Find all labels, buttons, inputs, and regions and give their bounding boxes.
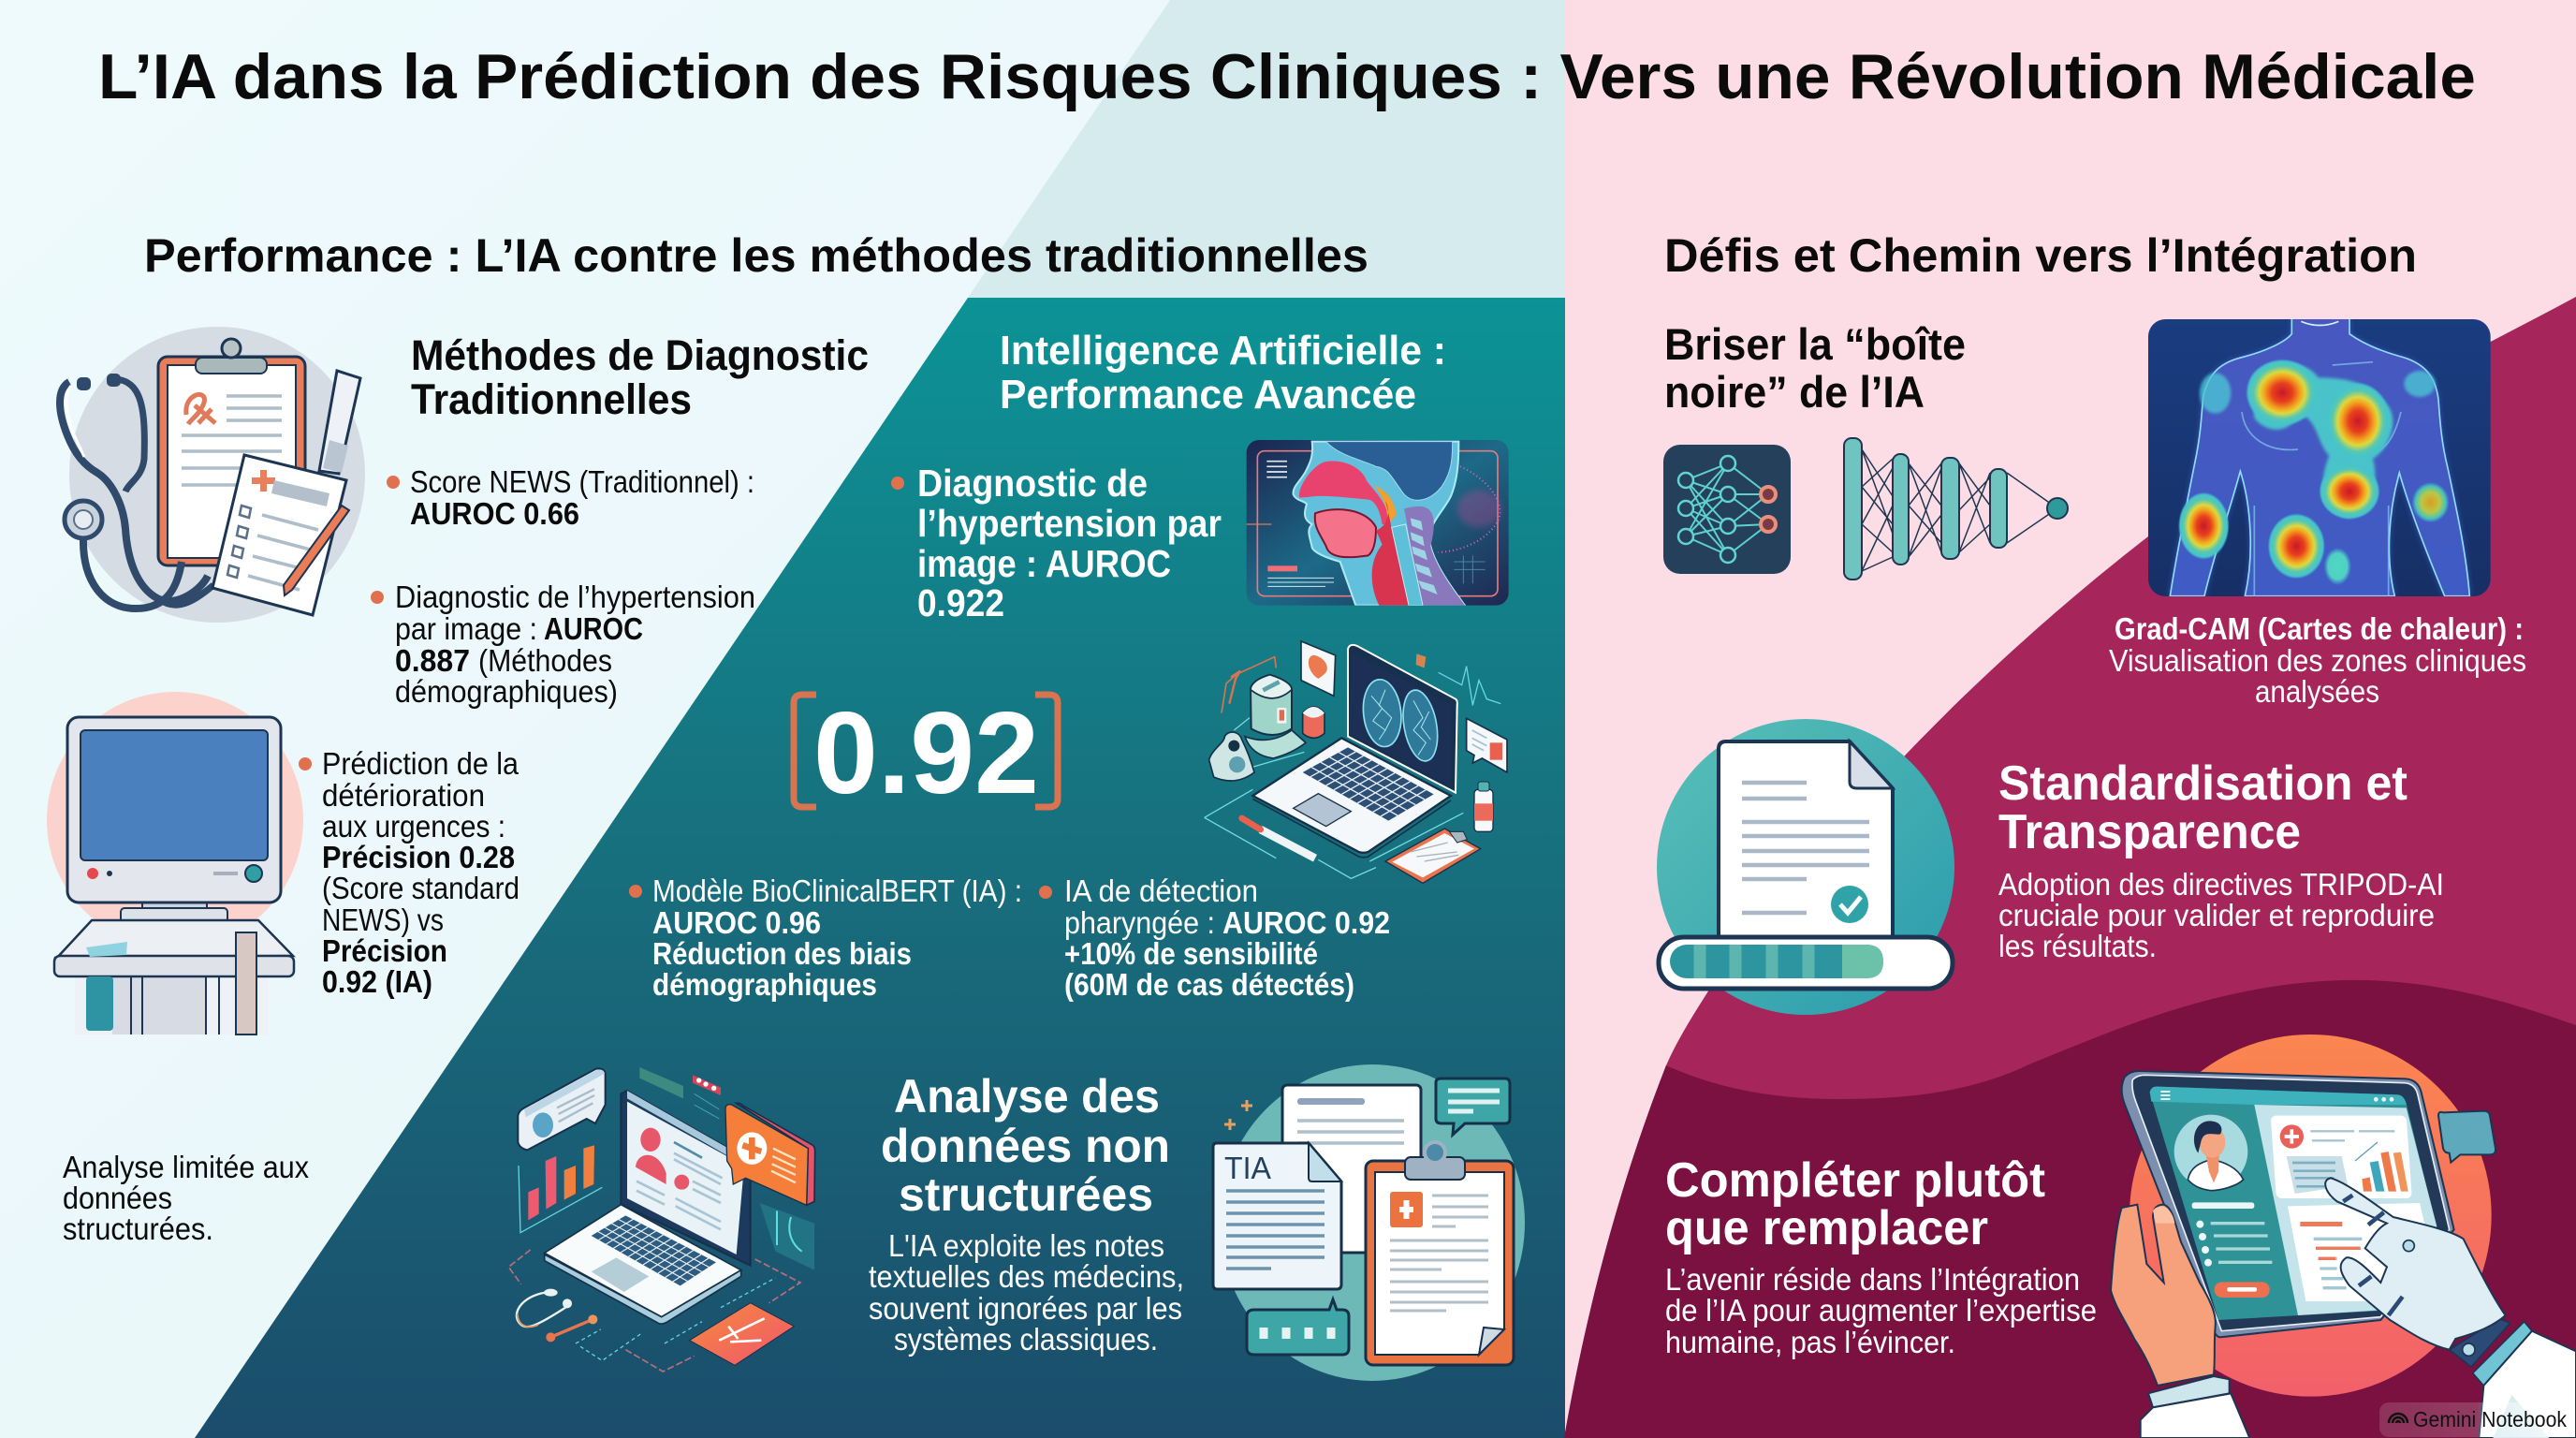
bullet: hypertension by image: 0.887 — [395, 643, 470, 678]
bullet: pharyngeal detection AI — [1039, 873, 1390, 1002]
background: light left panel — [0, 0, 1565, 1438]
icon: clinical notes and documents: TIA — [1224, 1151, 1271, 1185]
icon: tablet with human and robot hands — [2111, 1034, 2576, 1438]
bullet: NEWS score: AUROC 0.66 — [410, 496, 579, 531]
bullet: emergency deterioration: NEWS) vs — [322, 902, 444, 937]
heading: performance section: Performance : L’IA contre les méthodes traditionnelles — [144, 229, 1368, 282]
text: limitation note: structurées. — [63, 1211, 213, 1246]
heading: traditional methods: Traditionnelles — [411, 375, 692, 423]
bullet: AI hypertension diagnosis: 0.922 — [917, 581, 1004, 624]
panel: traditional methods — [47, 327, 869, 1246]
bullet: AI hypertension diagnosis: image : AUROC — [917, 542, 1171, 585]
caption: Grad-CAM: Grad-CAM (Cartes de chaleur) : — [2115, 611, 2524, 646]
bullet: hypertension by image: (Méthodes — [478, 643, 612, 678]
icon: medical monitor on cart — [47, 692, 303, 1034]
heading: standardisation: Transparence — [1998, 805, 2301, 859]
bullet: pharyngeal detection AI: (60M de cas détectés) — [1064, 967, 1354, 1002]
icon: validated document with progress bar — [1657, 719, 1954, 1015]
bullet: NEWS score — [387, 464, 754, 531]
bullet: emergency deterioration — [299, 746, 520, 999]
text: complement description: L’avenir réside dans l’Intégration — [1665, 1262, 2080, 1297]
text: unstructured data description: systèmes classiques. — [894, 1322, 1158, 1357]
heading: unstructured data: structurées — [899, 1168, 1153, 1221]
bullet: emergency deterioration: (Score standard — [322, 871, 520, 905]
text: unstructured data description — [869, 1228, 1184, 1357]
bullet: emergency deterioration: Prédiction de la — [322, 746, 520, 781]
bullet: BioClinicalBERT: AUROC 0.96 — [652, 905, 821, 940]
text: standardisation description — [1998, 867, 2444, 963]
heading: artificial intelligence: Intelligence Artificielle : — [1000, 328, 1446, 374]
heading: unstructured data: données non — [881, 1120, 1170, 1172]
panel: challenges and integration — [1657, 318, 2576, 1438]
bullet: AI hypertension diagnosis — [891, 462, 1222, 624]
heading: standardisation: Standardisation et — [1998, 756, 2408, 811]
icon: clinical notes and documents — [1213, 1064, 1525, 1381]
icon: isometric laptop with lungs — [1205, 641, 1507, 883]
bullet: BioClinicalBERT: Modèle BioClinicalBERT (IA) : — [652, 873, 1022, 908]
background: pink right panel — [1565, 0, 2576, 1438]
icon: neural layers diagram — [1844, 438, 2068, 580]
heading: unstructured data: Analyse des — [894, 1070, 1160, 1123]
bullet: emergency deterioration: Précision — [322, 933, 447, 968]
caption: Grad-CAM — [2109, 611, 2526, 709]
bullet: NEWS score: Score NEWS (Traditionnel) : — [410, 464, 754, 499]
caption: Grad-CAM: Visualisation des zones cliniques — [2109, 643, 2526, 678]
bullet: BioClinicalBERT: démographiques — [652, 967, 877, 1002]
heading: standardisation — [1998, 756, 2408, 859]
bullet: pharyngeal detection AI: AUROC 0.92 — [1222, 905, 1390, 940]
image: throat anatomy scan — [1247, 440, 1509, 606]
bullet: hypertension by image: démographiques) — [395, 674, 618, 709]
caption: Grad-CAM: analysées — [2255, 674, 2379, 709]
heading: traditional methods — [411, 331, 869, 423]
bullet: hypertension by image: AUROC — [544, 611, 643, 646]
background: maroon shape — [1564, 297, 2576, 1438]
bullet: BioClinicalBERT: Réduction des biais — [652, 936, 912, 971]
title: L’IA dans la Prédiction des Risques Cliniques : Vers une Révolution Médicale — [98, 41, 2476, 112]
text: standardisation description: cruciale pour valider et reproduire — [1998, 898, 2435, 932]
background: pale teal band — [968, 0, 1565, 298]
bullet: hypertension by image: par image : — [395, 611, 537, 646]
heading: artificial intelligence — [1000, 328, 1446, 418]
text: complement description — [1665, 1262, 2097, 1359]
heading: complement: Compléter plutôt — [1665, 1153, 2045, 1208]
icon: neural network card — [1663, 445, 1791, 574]
heading: breaking the black box — [1664, 319, 1966, 417]
text: limitation note: Analyse limitée aux — [63, 1150, 309, 1184]
heading: traditional methods: Méthodes de Diagnostic — [411, 331, 869, 379]
heading: breaking the black box: noire” de l’IA — [1664, 367, 1925, 417]
text: unstructured data description: textuelles des médecins, — [869, 1259, 1184, 1294]
bullet: pharyngeal detection AI: IA de détection — [1064, 873, 1258, 908]
heading: challenges section: Défis et Chemin vers l’Intégration — [1664, 229, 2417, 282]
bullet: hypertension by image — [371, 580, 755, 709]
heading: artificial intelligence: Performance Avancée — [1000, 372, 1416, 418]
bullet: AI hypertension diagnosis: l’hypertension par — [917, 502, 1222, 545]
background: teal panel — [195, 298, 1565, 1438]
image: Grad-CAM heat map — [2148, 318, 2491, 596]
text: complement description: de l’IA pour augmenter l’expertise — [1665, 1293, 2097, 1328]
bullet: pharyngeal detection AI: pharyngée : — [1064, 905, 1215, 940]
watermark: Gemini Notebook — [2379, 1402, 2574, 1437]
bullet: emergency deterioration: détérioration — [322, 778, 485, 813]
icon: clipboard and stethoscope — [60, 327, 365, 623]
text: standardisation description: Adoption des directives TRIPOD-AI — [1998, 867, 2444, 902]
bullet: BioClinicalBERT — [629, 873, 1022, 1002]
bullet: emergency deterioration: aux urgences : — [322, 809, 505, 844]
icon: laptop with data charts — [508, 1067, 815, 1372]
panel: artificial intelligence — [508, 328, 1525, 1381]
watermark: Gemini Notebook: Gemini Notebook — [2413, 1407, 2567, 1431]
heading: unstructured data — [881, 1070, 1170, 1221]
stat: 0.92 in brackets: 0.92 — [813, 689, 1039, 818]
bullet: emergency deterioration: 0.92 (IA) — [322, 964, 432, 999]
text: unstructured data description: souvent ignorées par les — [869, 1291, 1182, 1326]
background: dark maroon wave — [1564, 980, 2576, 1438]
heading: breaking the black box: Briser la “boîte — [1664, 319, 1966, 369]
bullet: AI hypertension diagnosis: Diagnostic de — [917, 462, 1148, 505]
bullet: hypertension by image: Diagnostic de l’hypertension — [395, 580, 755, 614]
text: limitation note: données — [63, 1181, 172, 1215]
heading: complement: que remplacer — [1665, 1201, 1988, 1255]
bullet: emergency deterioration: Précision 0.28 — [322, 840, 515, 874]
bullet: pharyngeal detection AI: +10% de sensibilité — [1064, 936, 1318, 971]
heading: complement — [1665, 1153, 2045, 1255]
text: complement description: humaine, pas l’évincer. — [1665, 1325, 1955, 1359]
text: limitation note — [63, 1150, 309, 1246]
text: standardisation description: les résultats. — [1998, 929, 2157, 963]
text: unstructured data description: L'IA exploite les notes — [888, 1228, 1164, 1263]
